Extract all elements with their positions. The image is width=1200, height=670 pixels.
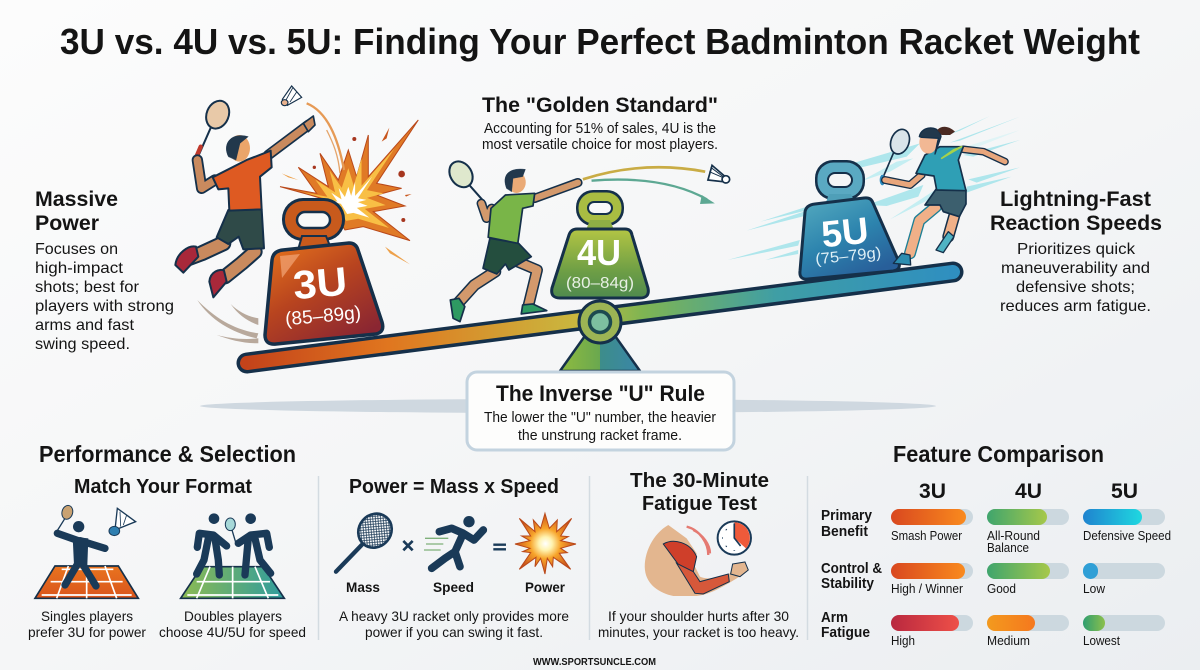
heading: feature comparison: Feature Comparison [893, 441, 1104, 467]
heading: fatigue test: The 30-Minute [630, 470, 769, 492]
callout: inverse U rule: The Inverse "U" Rule [496, 381, 705, 406]
icon: runner [424, 516, 483, 568]
heading: performance and selection: Performance & Selection [39, 441, 296, 467]
icon: racket [336, 507, 399, 572]
shuttlecock: drive [708, 165, 730, 183]
icon: doubles court [181, 513, 284, 598]
callout: inverse U rule: the unstrung racket frame. [518, 428, 682, 444]
impact dust [197, 300, 258, 343]
row: control and stability: Low [1083, 582, 1106, 596]
row: control and stability: Good [987, 582, 1016, 596]
row: arm fatigue: High [891, 634, 915, 648]
caption: doubles: choose 4U/5U for speed [159, 624, 306, 640]
row: primary benefit: All-Round [987, 529, 1040, 543]
text block: massive power: high-impact [35, 260, 124, 277]
speed streaks [728, 116, 1020, 260]
weight: 4U [552, 190, 648, 298]
text block: lightning-fast: Prioritizes quick [1017, 241, 1136, 258]
weight: 5U: 5U [819, 210, 870, 255]
caption: singles [28, 608, 146, 640]
text block: massive power: arms and fast [35, 317, 135, 334]
text block: golden standard: The "Golden Standard" [482, 93, 718, 117]
row: primary benefit: Smash Power [891, 529, 962, 543]
text block: golden standard: most versatile choice for most players. [482, 137, 718, 153]
row: primary benefit [821, 507, 1171, 555]
column headers: 4U [1015, 480, 1042, 503]
row: control and stability: Stability [821, 575, 875, 592]
row: arm fatigue: Lowest [1083, 634, 1120, 648]
row: primary benefit: Defensive Speed [1083, 529, 1171, 543]
caption: fatigue [598, 608, 799, 640]
heading: match your format: Match Your Format [74, 476, 252, 498]
weight: 3U: 3U [291, 260, 349, 308]
callout: inverse U rule [467, 372, 734, 450]
racket [445, 157, 485, 203]
racket [195, 97, 233, 160]
weight: 5U: (75–79g) [815, 244, 882, 268]
text block: massive power: players with strong [35, 298, 174, 315]
formula labels: Speed [433, 579, 474, 595]
caption: power [339, 608, 569, 640]
website credit: WWW.SPORTSUNCLE.COM [533, 657, 656, 668]
text block: massive power: Massive [35, 187, 118, 211]
text block: lightning-fast: Reaction Speeds [990, 211, 1162, 235]
title: 3U vs. 4U vs. 5U: Finding Your Perfect Badminton Racket Weight [60, 21, 1140, 62]
caption: doubles: Doubles players [184, 608, 282, 624]
formula labels: Power [525, 579, 566, 595]
racket [880, 127, 913, 185]
row: primary benefit: Benefit [821, 523, 868, 540]
heading: fatigue test: Fatigue Test [642, 493, 757, 515]
player: 3U jumping smash [175, 97, 315, 297]
text block: lightning-fast [990, 187, 1162, 315]
caption: singles: Singles players [41, 608, 133, 624]
row: primary benefit: Primary [821, 507, 873, 524]
weight: 5U [800, 160, 899, 279]
caption: fatigue: minutes, your racket is too heavy. [598, 624, 799, 640]
text block: massive power: Focuses on [35, 241, 118, 258]
caption: fatigue: If your shoulder hurts after 30 [608, 608, 789, 624]
heading: fatigue test [630, 470, 769, 515]
weight: 4U: (80–84g) [566, 275, 634, 292]
icon: equals [493, 545, 506, 549]
weight: 3U: (85–89g) [284, 303, 362, 330]
row: arm fatigue [821, 609, 1165, 648]
row: control and stability [821, 560, 1165, 596]
row: primary benefit: Balance [987, 541, 1029, 555]
formula icons [336, 507, 576, 574]
caption: doubles [159, 608, 306, 640]
beam [247, 272, 953, 363]
icon: explosion [515, 513, 576, 574]
caption: singles: prefer 3U for power [28, 624, 146, 640]
text block: massive power: shots; best for [35, 279, 140, 296]
column headers [919, 480, 1138, 503]
text block: massive power [35, 187, 174, 353]
text block: golden standard: Accounting for 51% of sales, 4U is the [484, 121, 716, 137]
column headers: 3U [919, 480, 946, 503]
pivot and base [560, 301, 640, 371]
heading: power formula: Power = Mass x Speed [349, 476, 559, 498]
player: 5U defensive [880, 127, 1005, 265]
caption: power: power if you can swing it fast. [365, 624, 543, 640]
icon: arm and clock [645, 521, 751, 596]
text block: massive power: swing speed. [35, 336, 130, 353]
chart: feature comparison [821, 480, 1171, 648]
formula labels: Mass [346, 579, 380, 595]
row: arm fatigue: Medium [987, 634, 1030, 648]
icon: times [403, 541, 413, 550]
text block: lightning-fast: reduces arm fatigue. [1000, 298, 1151, 315]
row: arm fatigue: Fatigue [821, 624, 870, 641]
shuttlecock: smash [281, 86, 302, 106]
column headers: 5U [1111, 480, 1138, 503]
text block: lightning-fast: defensive shots; [1016, 279, 1135, 296]
callout: inverse U rule: The lower the "U" number, the heavier [484, 410, 716, 426]
text block: golden standard [482, 93, 718, 153]
text block: lightning-fast: maneuverability and [1001, 260, 1150, 277]
weight: 4U: 4U [577, 232, 621, 273]
shuttle trajectory [583, 167, 715, 204]
explosion [280, 103, 418, 264]
formula labels [346, 579, 566, 595]
icon: singles court [35, 504, 138, 598]
ground shadow [200, 399, 936, 413]
player: 4U forehand [445, 157, 578, 322]
weight: 3U [265, 198, 383, 344]
row: control and stability: Control & [821, 560, 882, 577]
text block: massive power: Power [35, 211, 100, 235]
row: arm fatigue: Arm [821, 609, 848, 626]
caption: power: A heavy 3U racket only provides more [339, 608, 569, 624]
text block: lightning-fast: Lightning-Fast [1000, 187, 1151, 211]
row: control and stability: High / Winner [891, 582, 963, 596]
